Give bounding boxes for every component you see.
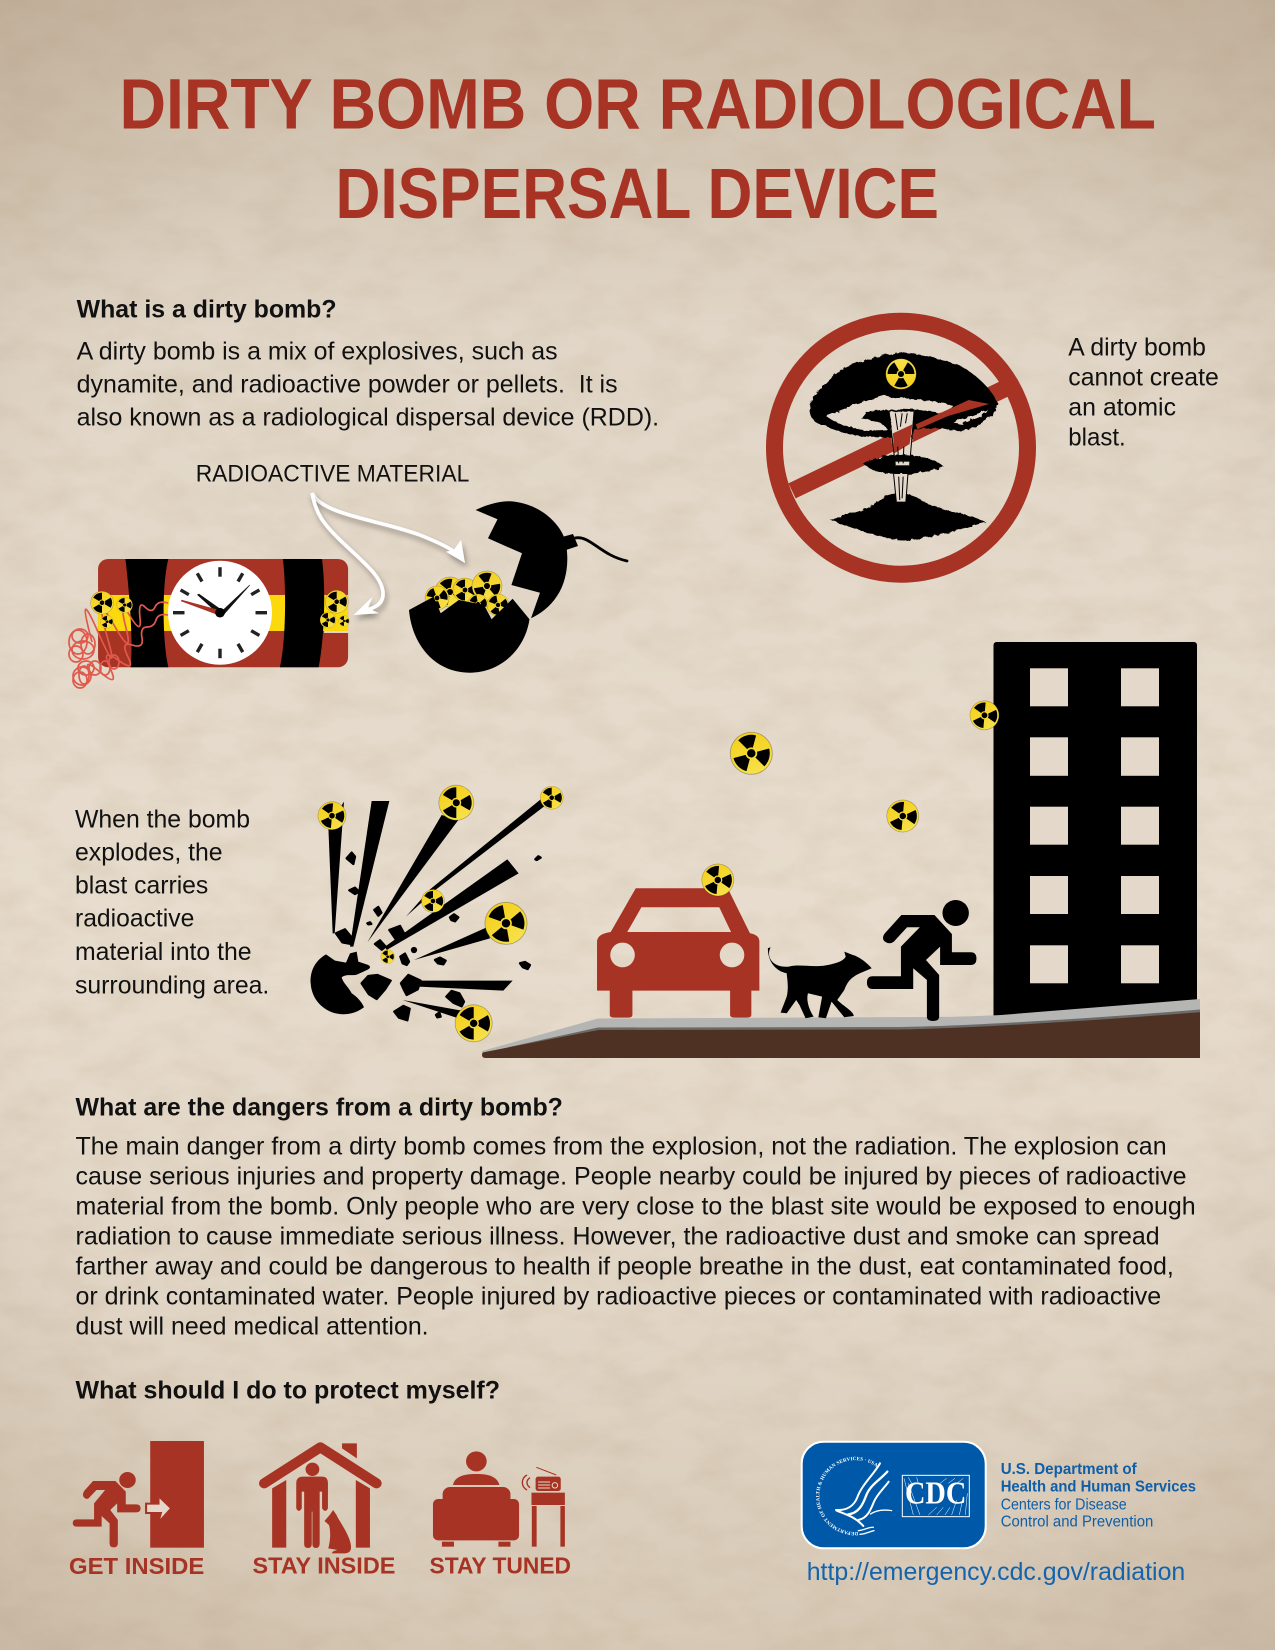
text block: dangers: cause serious injuries and property damage. People nearby could be injured by pieces of radioactive xyxy=(76,1162,1186,1190)
text block: cannot create an atomic blast xyxy=(1068,334,1219,452)
text block: blast carries radioactive material: material into the xyxy=(75,938,252,966)
text block: dangers: The main danger from a dirty bomb comes from the explosion, not the radiation. The explosion can xyxy=(76,1133,1167,1161)
icon: stay inside xyxy=(252,1443,395,1578)
text block: dangers: farther away and could be dangerous to health if people breathe in the dust, eat contaminated food, xyxy=(76,1252,1174,1280)
arrow: to round bomb xyxy=(312,493,465,563)
department name xyxy=(1001,1461,1196,1531)
text block: definition: dynamite, and radioactive powder or pellets. It is xyxy=(77,371,618,399)
car xyxy=(597,888,759,1018)
icon: cracked round bomb with radioactive pellets xyxy=(409,501,627,673)
eagle xyxy=(836,1463,892,1534)
seal lettering: DEPARTMENT OF HEALTH & HUMAN SERVICES · USA xyxy=(816,1456,878,1536)
text block: definition xyxy=(77,338,659,431)
department name: U.S. Department of xyxy=(1001,1461,1138,1478)
icon: get inside: GET INSIDE xyxy=(69,1553,204,1579)
url: http://emergency.cdc.gov/radiation xyxy=(807,1558,1185,1586)
heading: what is a dirty bomb: What is a dirty bomb? xyxy=(77,295,337,323)
ground xyxy=(482,999,1200,1058)
heading: dangers: What are the dangers from a dirty bomb? xyxy=(76,1094,563,1122)
department name: Control and Prevention xyxy=(1001,1514,1153,1531)
department name: Centers for Disease xyxy=(1001,1496,1127,1513)
text block: dangers: radiation to cause immediate serious illness. However, the radioactive dust and smoke can spread xyxy=(76,1222,1160,1250)
text block: dangers: or drink contaminated water. People injured by radioactive pieces or contaminated with radioactive xyxy=(76,1282,1161,1310)
text block: blast carries radioactive material: radioactive xyxy=(75,904,194,932)
icon: prohibited mushroom cloud xyxy=(774,321,1028,574)
text block: blast carries radioactive material xyxy=(75,806,269,1000)
CDC mark: CDC xyxy=(905,1476,966,1511)
text block: blast carries radioactive material: When the bomb xyxy=(75,806,250,834)
airborne radiation symbols xyxy=(697,696,1004,901)
text block: dangers: material from the bomb. Only people who are very close to the blast site would be exposed to enough xyxy=(76,1192,1196,1220)
clock face xyxy=(168,561,272,665)
title: DIRTY BOMB OR RADIOLOGICAL xyxy=(120,65,1156,144)
text block: dangers: dust will need medical attention. xyxy=(76,1312,429,1340)
text block: definition: A dirty bomb is a mix of explosives, such as xyxy=(77,338,558,366)
prohibition bar xyxy=(788,382,1008,498)
title: DISPERSAL DEVICE xyxy=(336,155,939,234)
icon: get inside xyxy=(69,1441,204,1579)
heading: protect myself: What should I do to protect myself? xyxy=(76,1376,500,1404)
text block: definition: also known as a radiological dispersal device (RDD). xyxy=(77,403,659,431)
department name: Health and Human Services xyxy=(1001,1479,1196,1496)
title xyxy=(120,65,1156,234)
icon: explosion with radioactive debris xyxy=(311,779,567,1049)
text block: blast carries radioactive material: surrounding area. xyxy=(75,972,269,1000)
label: radioactive material: RADIOACTIVE MATERIAL xyxy=(196,461,469,488)
running person xyxy=(867,900,976,1021)
icon: dynamite bomb with clock xyxy=(69,559,352,688)
wires xyxy=(69,602,168,688)
text block: cannot create an atomic blast: cannot create xyxy=(1068,364,1219,392)
text block: dangers xyxy=(76,1133,1196,1340)
text block: blast carries radioactive material: explodes, the xyxy=(75,838,223,866)
building xyxy=(994,642,1197,1018)
arrow: to dynamite xyxy=(312,493,383,615)
dog xyxy=(768,947,872,1018)
text block: cannot create an atomic blast: an atomic xyxy=(1068,394,1176,422)
icon: stay tuned xyxy=(430,1451,571,1578)
icon: stay inside: STAY INSIDE xyxy=(252,1552,395,1578)
logo: HHS and CDC xyxy=(800,1440,1196,1550)
text block: cannot create an atomic blast: blast. xyxy=(1068,424,1126,452)
text block: cannot create an atomic blast: A dirty bomb xyxy=(1068,334,1206,362)
text block: blast carries radioactive material: blast carries xyxy=(75,872,208,900)
icon: stay tuned: STAY TUNED xyxy=(430,1552,571,1578)
